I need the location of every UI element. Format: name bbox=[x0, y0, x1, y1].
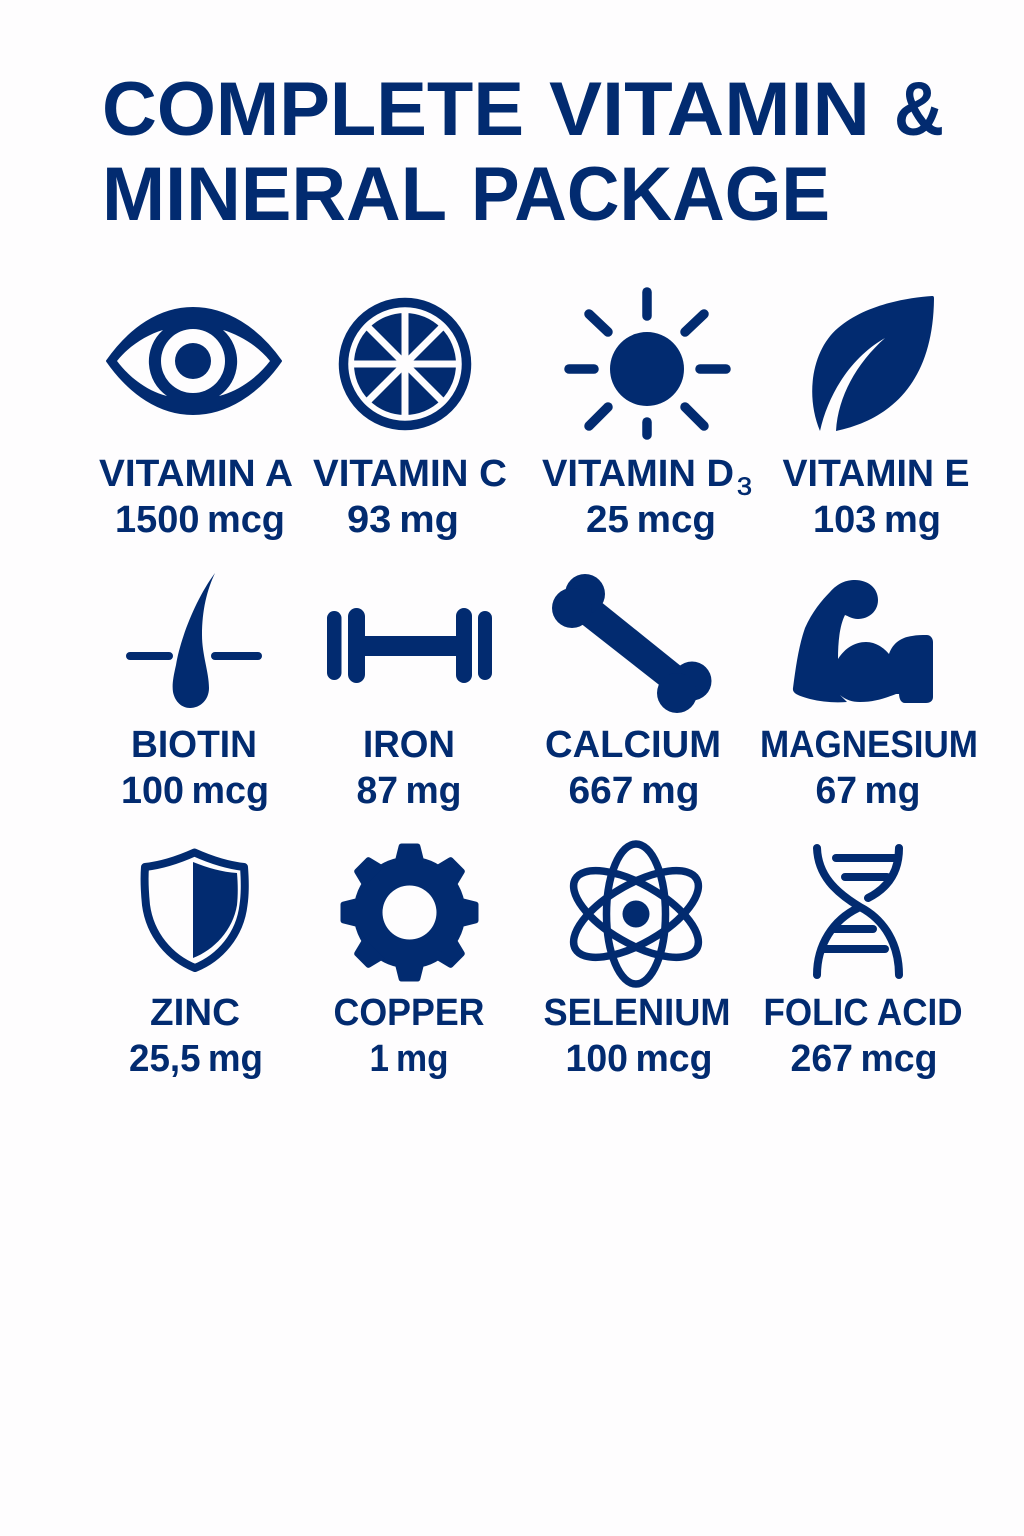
label: Folic Acid: FOLIC ACID bbox=[764, 992, 962, 1034]
label: Selenium bbox=[544, 992, 730, 1080]
label: Vitamin E: VITAMIN E bbox=[782, 453, 970, 495]
label: Magnesium: MAGNESIUM bbox=[760, 724, 978, 766]
label: Zinc bbox=[129, 992, 263, 1080]
label: Vitamin E bbox=[782, 453, 970, 541]
icon: DNA helix bbox=[817, 848, 899, 975]
icon: eye bbox=[107, 308, 281, 414]
label: Biotin bbox=[121, 724, 269, 812]
label: Vitamin A: VITAMIN A bbox=[99, 453, 293, 495]
label: Zinc: ZINC bbox=[150, 992, 240, 1034]
icon: leaf bbox=[812, 296, 934, 431]
label: Vitamin E: 103 mg bbox=[813, 499, 941, 541]
title: PACKAGE bbox=[471, 152, 830, 237]
title bbox=[102, 67, 944, 237]
label: Iron: IRON bbox=[363, 724, 455, 766]
label: Vitamin D3 bbox=[542, 453, 752, 541]
icon: atom bbox=[561, 844, 711, 984]
label: Vitamin D3: 25 mcg bbox=[586, 499, 716, 541]
label: Iron bbox=[356, 724, 462, 812]
label: Selenium: 100 mcg bbox=[566, 1038, 712, 1080]
label: Vitamin C: VITAMIN C bbox=[313, 453, 507, 495]
label: Vitamin A bbox=[99, 453, 293, 541]
title: & bbox=[894, 67, 944, 152]
label: Copper bbox=[334, 992, 484, 1080]
label: Folic Acid bbox=[764, 992, 962, 1080]
label: Magnesium: 67 mg bbox=[816, 770, 920, 812]
label: Calcium: 667 mg bbox=[568, 770, 700, 812]
icon: hair follicle bbox=[130, 573, 258, 708]
label: Magnesium bbox=[760, 724, 978, 812]
icon: citrus bbox=[344, 302, 466, 426]
label: Selenium: SELENIUM bbox=[544, 992, 730, 1034]
title: COMPLETE bbox=[102, 67, 524, 152]
title: MINERAL bbox=[102, 152, 447, 237]
label: Biotin: 100 mcg bbox=[121, 770, 269, 812]
label: Copper: COPPER bbox=[334, 992, 484, 1034]
icon: sun bbox=[569, 292, 726, 435]
label: Calcium: CALCIUM bbox=[545, 724, 721, 766]
label: Vitamin D3: VITAMIN D bbox=[542, 453, 734, 495]
label: Zinc: 25,5 mg bbox=[129, 1038, 263, 1080]
icon: gear bbox=[340, 844, 478, 982]
label: Iron: 87 mg bbox=[356, 770, 462, 812]
label: Folic Acid: 267 mcg bbox=[790, 1038, 938, 1080]
title: VITAMIN bbox=[549, 67, 870, 152]
label: Vitamin D3: 3 bbox=[737, 473, 752, 501]
icon: dumbbell bbox=[327, 608, 492, 683]
label: Biotin: BIOTIN bbox=[131, 724, 257, 766]
icon: bone bbox=[552, 574, 712, 713]
label: Calcium bbox=[545, 724, 721, 812]
icon: shield bbox=[145, 852, 245, 968]
label: Vitamin C: 93 mg bbox=[347, 499, 459, 541]
icon: flexed arm bbox=[793, 580, 933, 703]
label: Vitamin C bbox=[313, 453, 507, 541]
label: Vitamin A: 1500 mcg bbox=[115, 499, 285, 541]
label: Copper: 1 mg bbox=[370, 1038, 448, 1080]
